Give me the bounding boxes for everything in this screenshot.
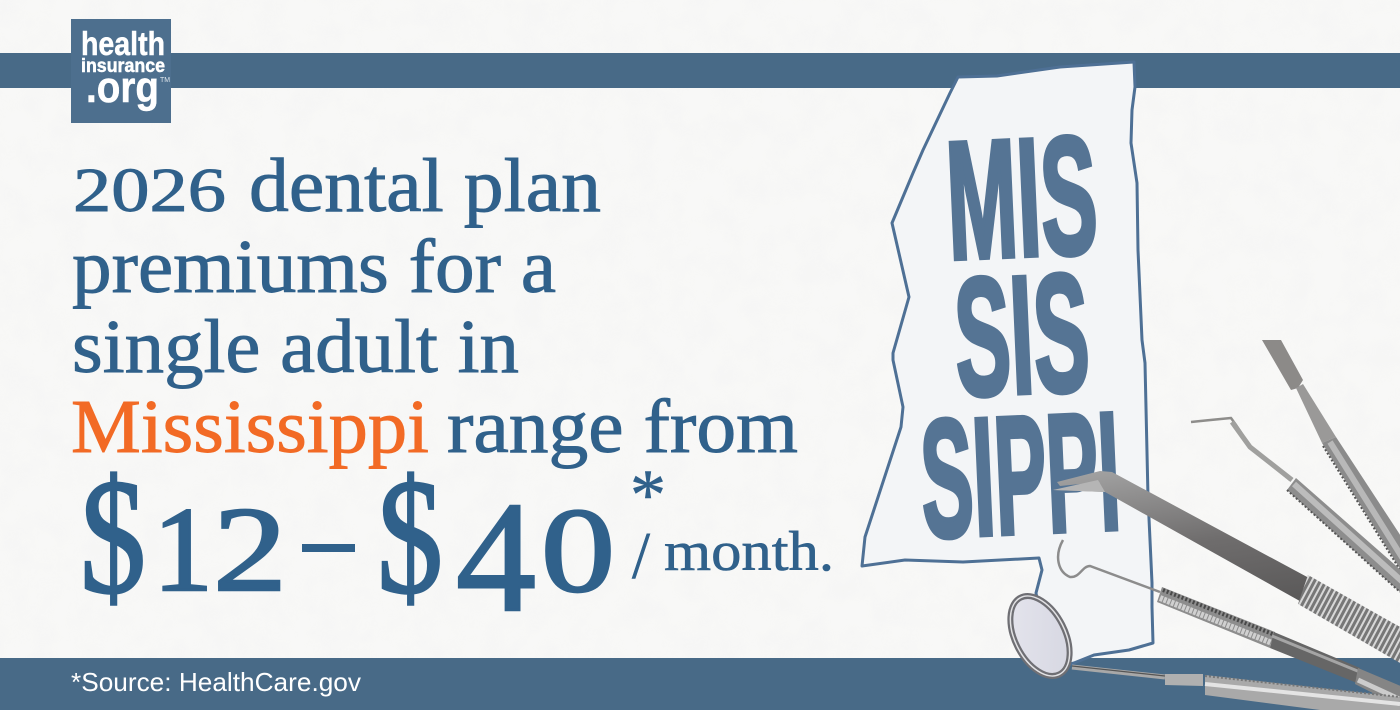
logo: healthinsurance.org: .org [86, 63, 159, 112]
instrument: probe [1191, 418, 1400, 592]
heading: premiums for a [72, 225, 556, 309]
instrument: tweezers [1053, 471, 1400, 663]
logo: healthinsurance.org [71, 19, 171, 123]
heading: Mississippi [71, 385, 429, 469]
instrument: hook explorer [1058, 540, 1400, 710]
heading: 2026 [73, 157, 226, 225]
per month label: / [632, 519, 650, 593]
source note: *Source: HealthCare.gov [71, 667, 361, 697]
state name lettering [905, 100, 1124, 573]
heading [71, 144, 798, 469]
per month label: month. [664, 521, 834, 583]
instrument: spatula [1262, 340, 1400, 585]
logo: healthinsurance.org: health [81, 25, 165, 62]
price range: 4 [456, 470, 536, 645]
top bar [0, 53, 1400, 88]
price range: $ [377, 445, 443, 628]
price range: 2 [213, 483, 287, 617]
instrument: dental mirror [998, 586, 1400, 710]
heading: single adult in [72, 305, 519, 389]
dental instruments [998, 340, 1400, 710]
Mississippi state map [862, 62, 1153, 670]
per month label [632, 519, 834, 593]
logo: healthinsurance.org: TM [160, 77, 170, 84]
logo: healthinsurance.org: insurance [81, 56, 165, 77]
price range: 1 [153, 483, 213, 617]
price range: 0 [541, 484, 615, 618]
heading: range from [447, 385, 798, 469]
state name lettering: MIS [943, 101, 1101, 295]
price range [80, 445, 615, 645]
price range: $ [80, 445, 146, 628]
asterisk: * [630, 455, 666, 535]
bottom bar [0, 658, 1400, 710]
heading: dental plan [249, 144, 601, 228]
state name lettering: SIS [951, 238, 1093, 432]
Mississippi state map: SIPPI [917, 377, 1124, 573]
state outline [862, 62, 1153, 670]
